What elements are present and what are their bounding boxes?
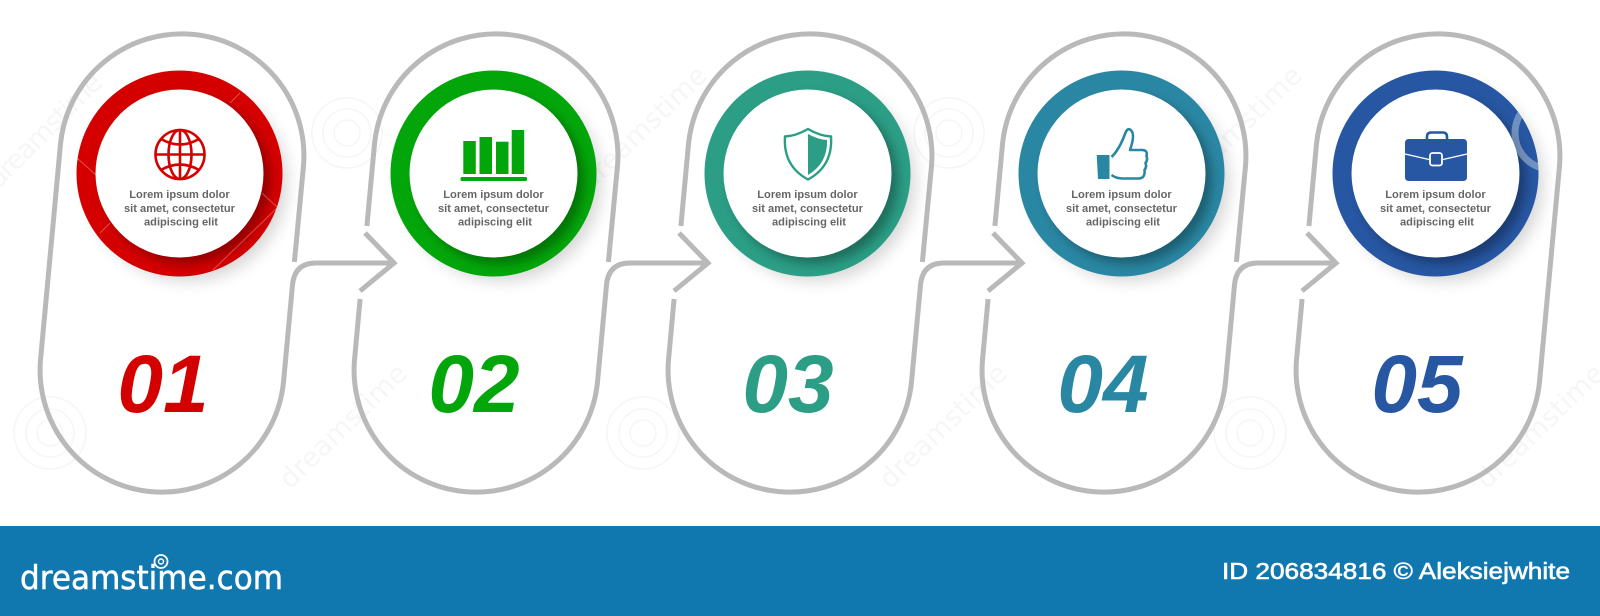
panel: step 3 outline with arrow xyxy=(668,34,1022,492)
caption: step 3: adipiscing elit xyxy=(772,216,846,228)
caption: step 2: Lorem ipsum dolor xyxy=(443,189,544,201)
caption: step 1: adipiscing elit xyxy=(144,216,218,228)
panel: step 5 outline xyxy=(1296,34,1560,492)
number: 04: 04 xyxy=(1057,339,1149,430)
watermark: stock photo marks: dreamstime xyxy=(573,60,714,197)
icon: briefcase xyxy=(1405,132,1467,181)
caption: step 4: Lorem ipsum dolor xyxy=(1071,189,1172,201)
icon: bar chart xyxy=(460,130,527,181)
caption: step 2: adipiscing elit xyxy=(458,216,532,228)
number: 01: 01 xyxy=(117,339,209,430)
watermark: stock photo marks: dreamstime xyxy=(1168,60,1309,197)
caption: step 1: sit amet, consectetur xyxy=(124,203,236,215)
ring: step 3 xyxy=(704,70,915,281)
caption: step 4 xyxy=(1066,189,1178,228)
caption: step 2 xyxy=(438,189,550,228)
caption: step 1 xyxy=(124,189,236,228)
ring: step 1 xyxy=(76,70,287,281)
number: 03: 03 xyxy=(742,339,834,430)
caption: step 1: Lorem ipsum dolor xyxy=(129,189,230,201)
caption: step 2: sit amet, consectetur xyxy=(438,203,550,215)
caption: step 4: adipiscing elit xyxy=(1086,216,1160,228)
icon: thumbs up xyxy=(1097,129,1147,179)
caption: step 3: Lorem ipsum dolor xyxy=(757,189,858,201)
watermark: stock photo marks xyxy=(0,60,1600,495)
caption: step 3 xyxy=(752,189,864,228)
watermark: stock photo marks: dreamstime xyxy=(273,358,414,495)
footer bar xyxy=(0,526,1600,616)
panel: step 4 outline with arrow xyxy=(982,34,1336,492)
caption: step 5: adipiscing elit xyxy=(1400,216,1474,228)
caption: step 5: Lorem ipsum dolor xyxy=(1385,189,1486,201)
number: 02: 02 xyxy=(428,339,520,430)
panel: step 2 outline with arrow xyxy=(354,34,708,492)
ring: step 2 xyxy=(390,70,601,281)
ring: step 5 xyxy=(1332,70,1549,287)
panel: step 1 outline with arrow xyxy=(40,34,394,492)
caption: step 4: sit amet, consectetur xyxy=(1066,203,1178,215)
footer credit: image ID and author: ID 206834816 © Aleksiejwhite xyxy=(1222,558,1570,584)
icon: shield xyxy=(785,129,831,180)
watermark: stock photo marks: dreamstime xyxy=(873,358,1014,495)
ring: step 4 xyxy=(1018,70,1229,281)
icon: globe xyxy=(156,130,204,179)
number: 05: 05 xyxy=(1371,339,1464,430)
footer brand: dreamstime.com: dreamstime.com xyxy=(20,558,283,597)
caption: step 5 xyxy=(1380,189,1492,228)
caption: step 3: sit amet, consectetur xyxy=(752,203,864,215)
caption: step 5: sit amet, consectetur xyxy=(1380,203,1492,215)
